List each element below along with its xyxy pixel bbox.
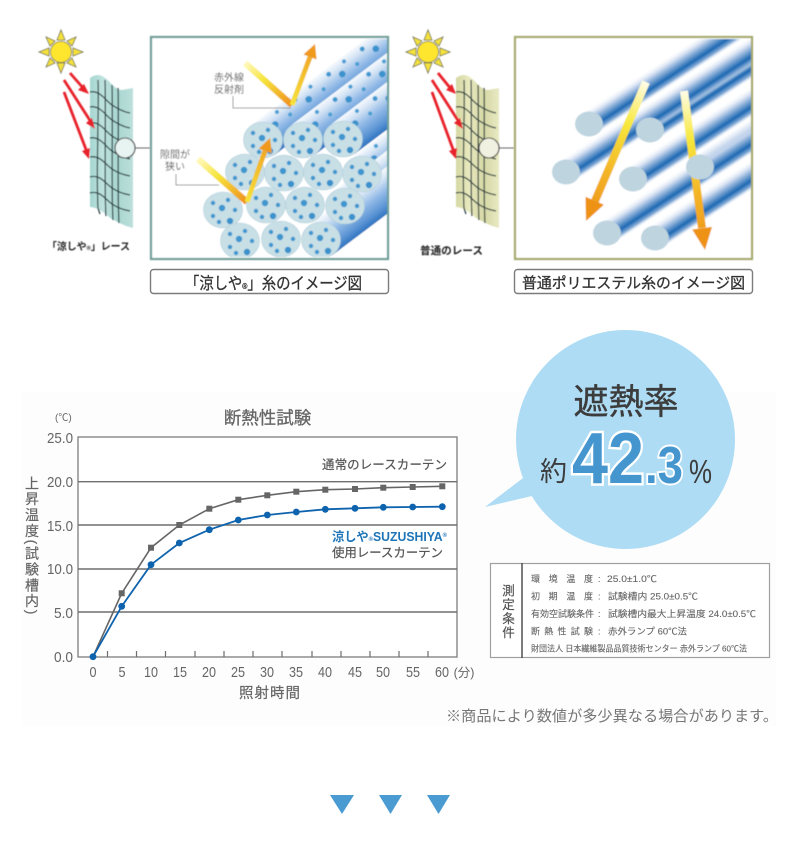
icon: sun xyxy=(39,30,83,73)
red heat arrows xyxy=(64,73,95,159)
caption: Suzushiya yarn: 「涼しや®」糸のイメージ図 xyxy=(185,274,362,293)
icon: three down triangles xyxy=(330,795,450,814)
callout: narrow gaps: 隙間が xyxy=(160,148,190,161)
conditions rows: 財団法人 日本繊維製品品質技術センター 赤外ランプ 60℃法 xyxy=(531,644,747,654)
callout: narrow gaps: 狭い xyxy=(165,160,185,173)
caption: regular polyester yarn xyxy=(514,270,752,294)
conditions rows: : xyxy=(598,592,601,602)
arrow: transmitted ray left xyxy=(586,82,646,221)
stat: about 42.3 percent: 約 xyxy=(540,457,567,487)
y axis title: 上昇温度(試験槽内) xyxy=(24,476,40,616)
conditions rows: 試験槽内 25.0±0.5℃ xyxy=(608,590,698,602)
conditions rows: : xyxy=(598,626,601,636)
callout: narrow gaps xyxy=(160,148,219,185)
stat: about 42.3 percent: .3 xyxy=(645,437,683,495)
caption: regular polyester yarn: 普通ポリエステル糸のイメージ図 xyxy=(522,275,745,292)
arrow: transmitted ray right xyxy=(684,91,712,250)
red heat arrows xyxy=(432,73,463,159)
magnifier circle and connector xyxy=(115,138,150,158)
conditions heading: 測定条件 xyxy=(500,584,514,640)
x axis labels: 60 xyxy=(435,664,449,681)
series label: regular: 通常のレースカーテン xyxy=(322,458,447,472)
x axis labels: 45 xyxy=(348,664,362,681)
conditions rows: 初 期 温 度 xyxy=(531,590,593,602)
diagram: Suzushiya lace xyxy=(39,30,150,253)
y axis labels: 0.0 xyxy=(54,649,73,666)
x axis labels: 15 xyxy=(173,664,187,681)
lace curtain xyxy=(90,75,133,228)
caption: Suzushiya yarn xyxy=(150,270,388,294)
lace curtain xyxy=(456,75,499,228)
x axis labels: 25 xyxy=(231,664,245,681)
panel: Suzushiya yarn image xyxy=(149,35,390,261)
x axis labels: 20 xyxy=(202,664,216,681)
panel: regular polyester yarn image xyxy=(513,35,754,261)
arrow: lower reflected ray xyxy=(198,138,272,202)
y unit: (℃) xyxy=(55,413,72,424)
x axis labels: 30 xyxy=(260,664,274,681)
line chart: insulation test xyxy=(24,408,474,702)
y axis labels: 20.0 xyxy=(47,474,73,491)
y axis labels: 10.0 xyxy=(47,561,73,578)
label: regular lace: 普通のレース xyxy=(420,244,483,257)
conditions rows: 環 境 温 度 xyxy=(531,573,593,584)
chart title: 断熱性試験 xyxy=(224,408,312,428)
callout: reflective agent: 反射剤 xyxy=(214,84,244,96)
conditions rows: : xyxy=(598,609,601,619)
x axis labels: 50 xyxy=(376,664,390,681)
series label: Suzushiya: 使用レースカーテン xyxy=(332,545,443,560)
icon: sun xyxy=(406,30,450,73)
series label: Suzushiya: 涼しや®SUZUSHIYA xyxy=(332,530,444,544)
x axis labels: 5 xyxy=(118,664,126,681)
x axis labels: (分) xyxy=(454,666,474,680)
stat: about 42.3 percent: % xyxy=(689,453,712,490)
x axis labels: 10 xyxy=(144,664,158,681)
callout: reflective agent xyxy=(214,71,291,108)
footnote: ※商品により数値が多少異なる場合があります。 xyxy=(446,707,778,725)
conditions rows: 有効空試験条件 xyxy=(531,608,594,619)
conditions rows xyxy=(531,573,756,654)
conditions rows: : xyxy=(598,574,601,584)
yarn face over ray xyxy=(686,154,714,180)
arrow: upper reflected ray xyxy=(245,44,317,105)
x axis labels: 55 xyxy=(406,664,420,681)
diagram: regular lace xyxy=(406,30,514,257)
conditions rows: 試験槽内最大上昇温度 24.0±0.5℃ xyxy=(608,608,756,619)
series: regular lace curtain xyxy=(93,483,445,657)
series label: Suzushiya: ® xyxy=(443,532,448,539)
x axis labels xyxy=(90,664,474,681)
yarn strands xyxy=(552,38,752,251)
x axis labels: 40 xyxy=(318,664,332,681)
series: Suzushiya lace curtain xyxy=(90,503,446,660)
yarn bundle xyxy=(202,38,388,258)
conditions rows: 25.0±1.0℃ xyxy=(607,574,657,584)
x axis labels: 0 xyxy=(90,664,96,681)
stat: about 42.3 percent xyxy=(540,419,712,499)
x axis title: 照射時間 xyxy=(239,685,301,702)
stat: about 42.3 percent: 42 xyxy=(572,419,644,499)
callout: reflective agent: 赤外線 xyxy=(214,71,244,84)
y axis labels xyxy=(47,430,73,666)
label: Suzushiya lace: 「涼しや®」レース xyxy=(47,240,130,253)
conditions rows: 断 熱 性 試 験 xyxy=(531,626,593,636)
gridlines and frame xyxy=(78,437,457,657)
chart backdrop xyxy=(22,392,776,726)
y axis labels: 25.0 xyxy=(47,430,73,447)
x axis labels: 35 xyxy=(289,664,303,681)
magnifier circle and connector xyxy=(479,138,514,158)
heading: heat shielding rate: 遮熱率 xyxy=(573,383,679,422)
conditions rows: 赤外ランプ 60℃法 xyxy=(608,626,687,636)
panel: measurement conditions xyxy=(490,563,770,658)
y axis labels: 5.0 xyxy=(54,605,73,622)
speech bubble: heat shielding rate xyxy=(485,330,735,549)
y axis labels: 15.0 xyxy=(47,518,73,535)
series label: Suzushiya xyxy=(332,530,448,560)
